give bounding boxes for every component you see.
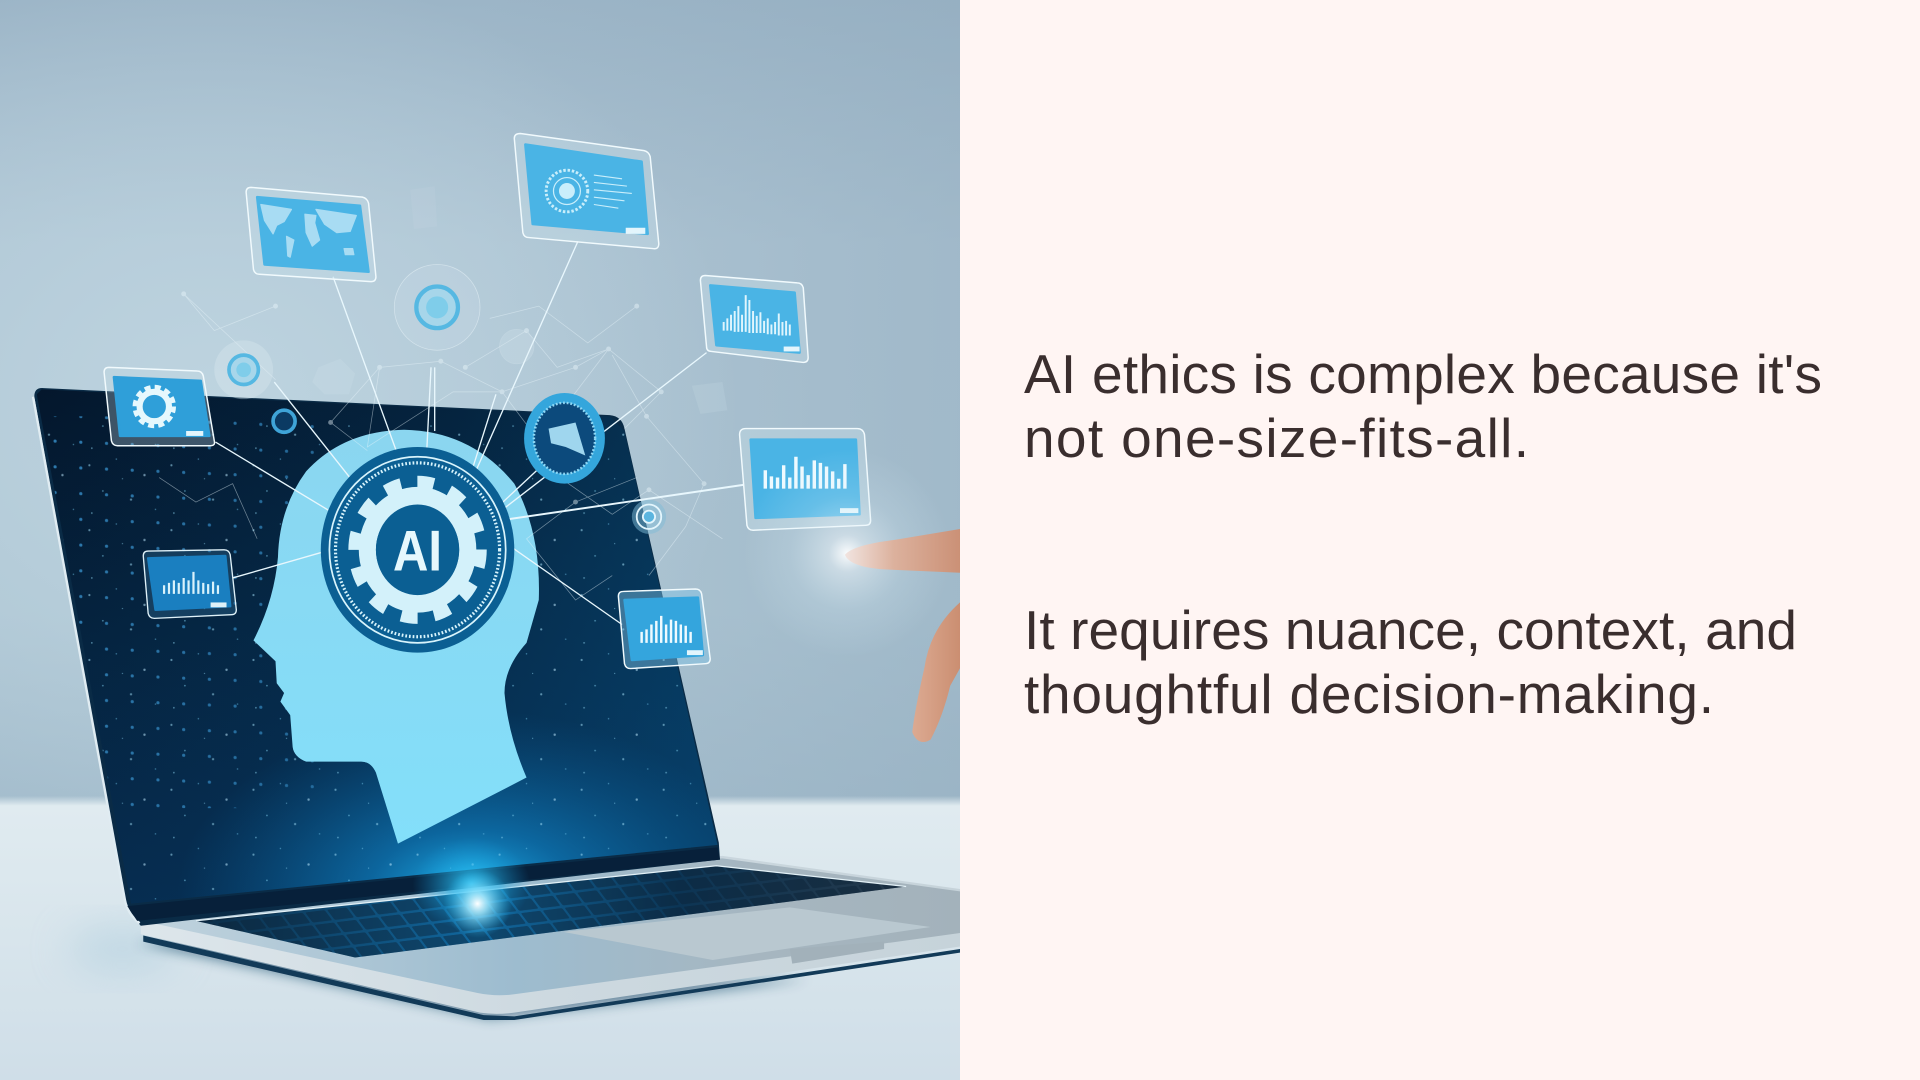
keyboard <box>196 866 906 958</box>
panel: laptop illustration <box>0 0 960 1080</box>
widget: faint dial <box>500 329 534 364</box>
circular widgets <box>214 264 666 534</box>
widget: left dial <box>214 340 273 399</box>
card: left chart <box>143 550 236 618</box>
report text lines <box>594 175 632 208</box>
laptop screen <box>37 390 718 904</box>
widget: top dial <box>394 264 480 350</box>
trackpad <box>563 907 931 960</box>
card: world map <box>246 187 376 282</box>
left chart bars <box>164 572 218 594</box>
card: right chart <box>740 429 871 530</box>
settings gear icon <box>135 387 174 426</box>
right chart bars <box>765 457 845 489</box>
panel background <box>960 0 1920 1080</box>
emblem dark ring <box>321 447 514 653</box>
report dial <box>546 170 588 212</box>
table surface <box>0 796 960 1080</box>
widget: big blue dial <box>524 393 605 484</box>
world map continents <box>261 204 356 257</box>
laptop <box>32 388 960 1020</box>
text block: complexity statement: AI ethics is complex because it's <box>1024 343 1822 405</box>
text block: complexity statement: not one-size-fits-all. <box>1024 407 1529 469</box>
network web <box>159 186 727 600</box>
widget: right dial <box>632 500 666 534</box>
connector lines <box>216 241 743 624</box>
text block: complexity statement <box>1024 343 1822 469</box>
hand lower finger <box>912 602 960 742</box>
upper chart bars <box>724 295 790 336</box>
lower right chart bars <box>642 616 691 643</box>
card: lower right chart <box>618 589 710 669</box>
card: gear report <box>514 133 659 249</box>
widget: small dark dial <box>273 410 295 432</box>
gear <box>354 482 481 618</box>
text block: nuance statement: It requires nuance, context, and <box>1024 599 1797 661</box>
text block: nuance statement <box>1024 599 1797 725</box>
text block: nuance statement: thoughtful decision-making. <box>1024 663 1714 725</box>
laptop base <box>141 856 960 1020</box>
pointing finger <box>764 463 960 620</box>
thumb notch <box>790 942 884 964</box>
laptop lid <box>33 388 720 926</box>
panel: text <box>1024 343 1822 725</box>
head silhouette <box>253 430 539 844</box>
card: gear settings <box>104 367 215 446</box>
laptop shadow <box>137 931 808 1019</box>
keyboard light glow <box>413 838 530 938</box>
AI label: AI <box>393 520 442 584</box>
gear hub <box>376 504 459 595</box>
AI gear emblem <box>321 447 514 653</box>
card: upper chart <box>700 276 808 362</box>
wall background <box>0 0 960 813</box>
